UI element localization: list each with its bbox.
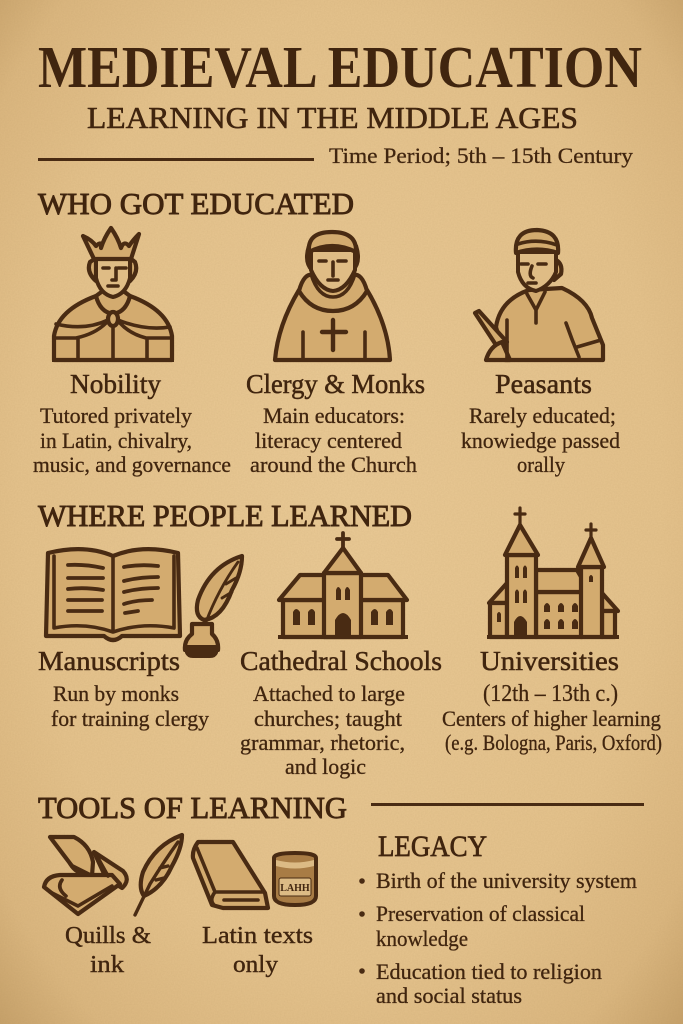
text: cathedral schools description: churches; taught <box>254 706 402 731</box>
list: legacy points: Preservation of classical <box>376 901 585 926</box>
label: universities: Universities <box>480 646 619 676</box>
label: latin texts only: only <box>233 952 278 978</box>
heading: tools of learning: TOOLS OF LEARNING <box>38 790 347 825</box>
subtitle: LEARNING IN THE MIDDLE AGES <box>87 100 578 135</box>
text: cathedral schools description <box>240 681 405 779</box>
icon: closed book <box>193 842 268 908</box>
list: legacy points <box>359 868 637 1008</box>
text: clergy description: literacy centered <box>255 428 402 453</box>
label: manuscripts: Manuscripts <box>38 646 180 676</box>
text: nobility description: music, and governance <box>33 452 231 477</box>
icon: ink jar: LAHH <box>280 883 310 894</box>
label: latin texts only: Latin texts <box>202 923 313 949</box>
text: nobility description <box>33 403 231 477</box>
label: quills and ink: ink <box>90 952 124 978</box>
text: universities description: (12th – 13th c.) <box>483 681 618 707</box>
panel: where people learned <box>38 498 662 779</box>
label: nobility: Nobility <box>70 369 161 399</box>
text: peasants description: orally <box>517 452 565 477</box>
heading: where people learned: WHERE PEOPLE LEARNED <box>38 498 412 533</box>
icon: open book with quill and ink <box>46 549 242 658</box>
text: manuscripts description: Run by monks <box>53 681 179 706</box>
icon: ink jar <box>274 853 316 905</box>
text: clergy description <box>250 403 417 477</box>
text: cathedral schools description: grammar, rhetoric, <box>240 730 405 755</box>
text: nobility description: in Latin, chivalry, <box>40 428 192 453</box>
time period row: Time Period; 5th – 15th Century <box>329 143 633 168</box>
panel: tools of learning <box>38 790 644 978</box>
list: legacy points: knowledge <box>376 926 468 951</box>
icon: folded parchment <box>44 837 127 914</box>
time period row <box>38 143 633 168</box>
icon: university <box>487 508 619 639</box>
label: clergy and monks: Clergy & Monks <box>246 369 425 399</box>
icon: peasant <box>475 230 603 362</box>
text: cathedral schools description: and logic <box>285 754 366 779</box>
heading: legacy: LEGACY <box>378 830 487 863</box>
label: cathedral schools: Cathedral Schools <box>240 646 442 676</box>
icon: cathedral school <box>278 533 408 639</box>
icon: monk <box>274 232 390 362</box>
label: latin texts only <box>202 923 313 978</box>
list: legacy points: Education tied to religion <box>376 959 602 984</box>
text: peasants description: knowiedge passed <box>461 428 620 453</box>
list: legacy points: Birth of the university system <box>376 868 637 893</box>
text: cathedral schools description: Attached to large <box>253 681 405 706</box>
text: peasants description: Rarely educated; <box>469 403 616 428</box>
text: universities description: Centers of higher learning <box>442 706 661 731</box>
label: quills and ink: Quills & <box>65 923 151 949</box>
label: peasants: Peasants <box>495 369 592 399</box>
text: peasants description <box>461 403 620 477</box>
text: nobility description: Tutored privately <box>40 403 192 428</box>
icon: king <box>52 228 174 362</box>
panel: legacy <box>359 830 637 1008</box>
list: legacy points: and social status <box>376 983 522 1008</box>
text: clergy description: around the Church <box>250 452 417 477</box>
text: clergy description: Main educators: <box>263 403 405 428</box>
text: universities description <box>442 681 662 755</box>
label: quills and ink <box>65 923 151 978</box>
text: manuscripts description <box>51 681 209 731</box>
heading: who got educated: WHO GOT EDUCATED <box>38 186 354 221</box>
text: manuscripts description: for training clergy <box>51 706 209 731</box>
panel: who got educated <box>33 186 620 477</box>
icon: quill <box>135 835 182 915</box>
